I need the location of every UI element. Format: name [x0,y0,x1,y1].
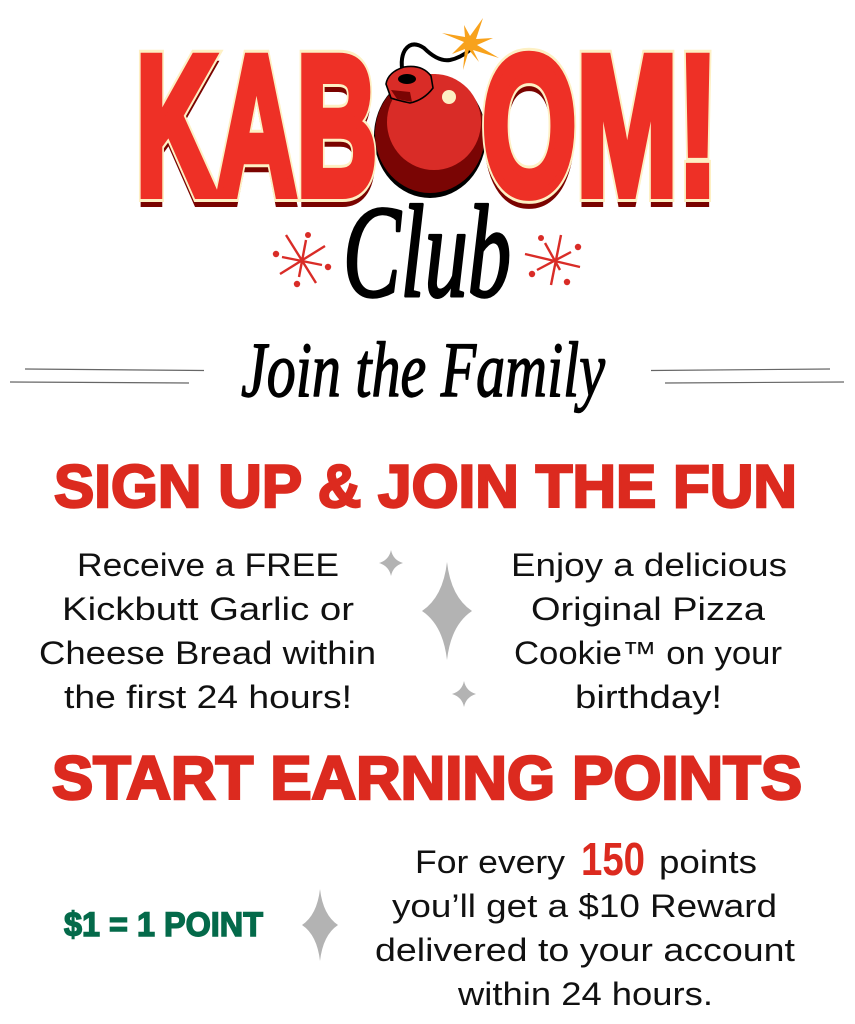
wordmark: KAB: KAB [136,15,377,236]
text block: points reward: 150 [581,833,645,885]
text block: free bread: Receive a FREE [77,547,339,583]
icon: sparkle small top [379,550,403,576]
heading: start earning points: START EARNING POINTS [52,744,802,812]
text block: birthday cookie: Original Pizza [531,591,765,627]
icon: sparkle large [422,562,472,660]
wordmark: OM! [482,15,718,244]
icon: right starburst [525,235,581,285]
text block: birthday cookie: birthday! [575,679,722,715]
text block: free bread: the first 24 hours! [64,679,352,715]
icon: orange spark [442,18,499,70]
text block: points reward: For every [415,844,565,880]
icon: sparkle small bottom [452,681,476,707]
text block: points reward: you’ll get a $10 Reward [392,888,777,924]
wordmark: KAB: KAB [136,15,377,236]
text block: free bread [39,547,376,715]
text block: points reward: points [659,844,757,880]
wordmark: KAB [136,15,377,244]
text block: birthday cookie [511,547,787,715]
text block: points reward: delivered to your account [375,932,795,968]
logo: KABOOM! Club [136,15,718,325]
text block: free bread: Kickbutt Garlic or [62,591,354,627]
text block: birthday cookie: Cookie™ on your [514,635,782,671]
text block: points reward [375,833,795,1012]
icon: sparkle bottom [302,889,338,961]
text block: points reward: within 24 hours. [457,976,713,1012]
heading: sign up: SIGN UP & JOIN THE FUN [54,453,797,520]
icon: left starburst [273,232,331,287]
callout: $1 = 1 point: $1 = 1 POINT [64,906,263,944]
wordmark: KAB: KAB [136,23,377,244]
text block: birthday cookie: Enjoy a delicious [511,547,787,583]
subtitle: Join the Family: Join the Family [241,326,605,413]
text block: free bread: Cheese Bread within [39,635,376,671]
icon: bomb [374,44,486,198]
script word: Club: Club [343,178,511,325]
